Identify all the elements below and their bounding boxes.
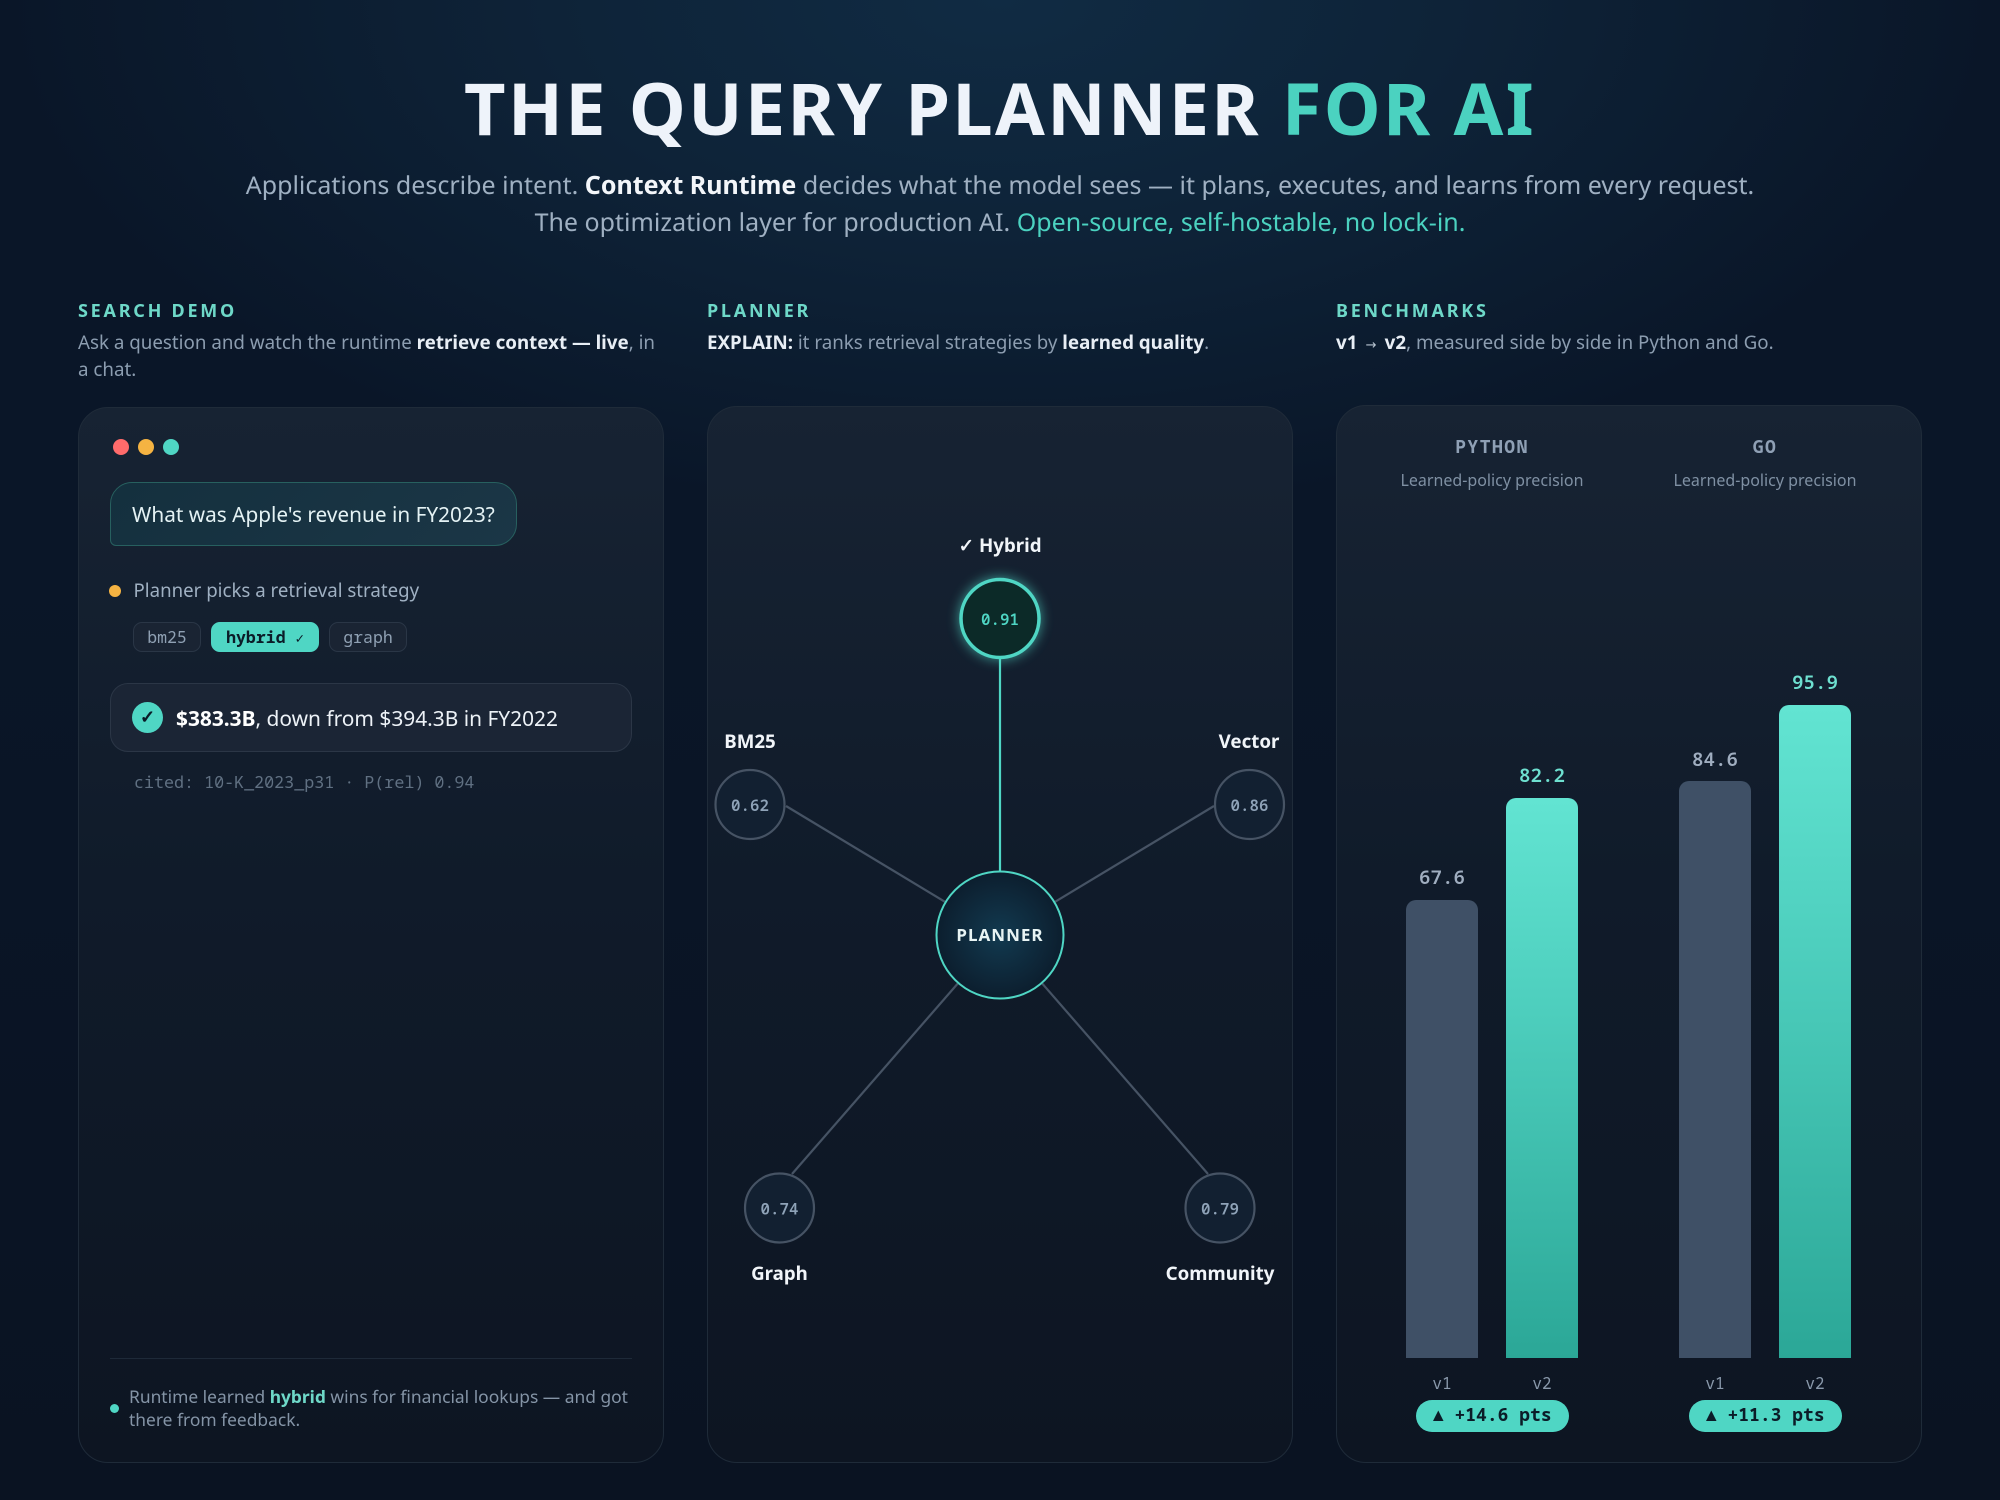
panel: planner bbox=[707, 406, 1293, 1463]
python v2 label: v2 bbox=[1532, 1372, 1552, 1394]
node: community: 0.79 bbox=[1201, 1198, 1239, 1220]
go delta pill bbox=[1689, 1400, 1842, 1432]
planner status line: Planner picks a retrieval strategy bbox=[134, 578, 419, 602]
go caption: Learned-policy precision bbox=[1674, 469, 1856, 491]
node: community bbox=[1166, 1174, 1275, 1286]
python v2 value: 82.2 bbox=[1519, 761, 1565, 788]
section heading: search demo: SEARCH DEMO bbox=[78, 298, 237, 322]
icon: check bbox=[132, 702, 163, 733]
go v2 value: 95.9 bbox=[1792, 668, 1838, 695]
node: vector: 0.86 bbox=[1231, 794, 1268, 816]
footer note bbox=[110, 1358, 632, 1434]
panel: search demo bbox=[78, 407, 664, 1463]
node: hybrid bbox=[958, 533, 1042, 660]
go delta pill: ▲ +11.3 pts bbox=[1706, 1403, 1825, 1427]
strategy chips bbox=[133, 622, 407, 652]
footer note: Runtime learned hybrid wins for financial lookups — and got bbox=[129, 1385, 628, 1409]
answer card bbox=[110, 683, 632, 752]
python caption: Learned-policy precision bbox=[1400, 469, 1584, 491]
python v1 label: v1 bbox=[1432, 1372, 1452, 1394]
section description: benchmarks: v1 v2, measured side by side in Python and Go. bbox=[1336, 330, 1774, 354]
user question bubble: What was Apple's revenue in FY2023? bbox=[132, 501, 495, 529]
go v1 label: v1 bbox=[1705, 1372, 1725, 1394]
radial planner diagram bbox=[714, 533, 1286, 1286]
node: bm25 bbox=[716, 729, 784, 839]
answer card: $383.3B, down from $394.3B in FY2022 bbox=[176, 705, 558, 733]
python v2 bar bbox=[1506, 798, 1578, 1358]
node: graph: Graph bbox=[751, 1261, 808, 1286]
title: THE QUERY PLANNER FOR AI bbox=[464, 59, 1536, 157]
section heading: planner: PLANNER bbox=[707, 298, 811, 322]
python heading: PYTHON bbox=[1455, 435, 1529, 459]
strategy chips: graph bbox=[343, 625, 393, 648]
node: community: Community bbox=[1166, 1261, 1275, 1286]
chart: python bbox=[1400, 435, 1584, 1432]
subtitle bbox=[246, 168, 1754, 239]
python v1 value: 67.6 bbox=[1419, 863, 1465, 890]
go v2 label: v2 bbox=[1805, 1372, 1825, 1394]
go v1 value: 84.6 bbox=[1692, 745, 1738, 772]
citation: cited: 10-K_2023_p31 · P(rel) 0.94 bbox=[134, 770, 474, 793]
python v1 bar bbox=[1406, 900, 1478, 1358]
python delta pill bbox=[1416, 1400, 1568, 1432]
subtitle: The optimization layer for production AI. Open-source, self-hostable, no lock-in. bbox=[535, 205, 1465, 239]
go heading: GO bbox=[1753, 435, 1777, 459]
strategy chips: hybrid ✓ bbox=[226, 625, 304, 648]
footer note: there from feedback. bbox=[129, 1408, 300, 1432]
icon: check: ✓ bbox=[140, 707, 155, 728]
section heading: benchmarks: BENCHMARKS bbox=[1336, 298, 1489, 322]
node: graph: 0.74 bbox=[761, 1198, 798, 1220]
section description: planner: EXPLAIN: it ranks retrieval strategies by learned quality. bbox=[707, 330, 1209, 354]
connector lines bbox=[786, 650, 1214, 1174]
strategy chips: bm25 bbox=[147, 625, 187, 648]
node: hybrid: ✓ Hybrid bbox=[958, 533, 1042, 558]
node: planner hub: PLANNER bbox=[956, 923, 1044, 946]
node: hybrid: 0.91 bbox=[981, 608, 1019, 630]
node: vector bbox=[1215, 729, 1284, 839]
chart: go bbox=[1674, 435, 1856, 1432]
section description: benchmarks: → bbox=[1366, 338, 1377, 352]
subtitle: Applications describe intent. Context Runtime decides what the model sees — it plans, executes, and learns from every request. bbox=[246, 168, 1754, 202]
node: bm25: 0.62 bbox=[731, 794, 769, 816]
window dots bbox=[113, 439, 179, 455]
node: graph bbox=[745, 1174, 814, 1286]
user question bubble bbox=[110, 482, 517, 546]
node: bm25: BM25 bbox=[724, 729, 776, 754]
go v1 bar bbox=[1679, 781, 1751, 1358]
node: planner hub bbox=[936, 872, 1064, 998]
go v2 bar bbox=[1779, 704, 1851, 1358]
panel: benchmarks bbox=[1336, 405, 1922, 1463]
node: vector: Vector bbox=[1219, 729, 1280, 754]
section description: search demo: Ask a question and watch the runtime retrieve context — live, in a chat. bbox=[78, 330, 655, 382]
python delta pill: ▲ +14.6 pts bbox=[1433, 1403, 1552, 1427]
